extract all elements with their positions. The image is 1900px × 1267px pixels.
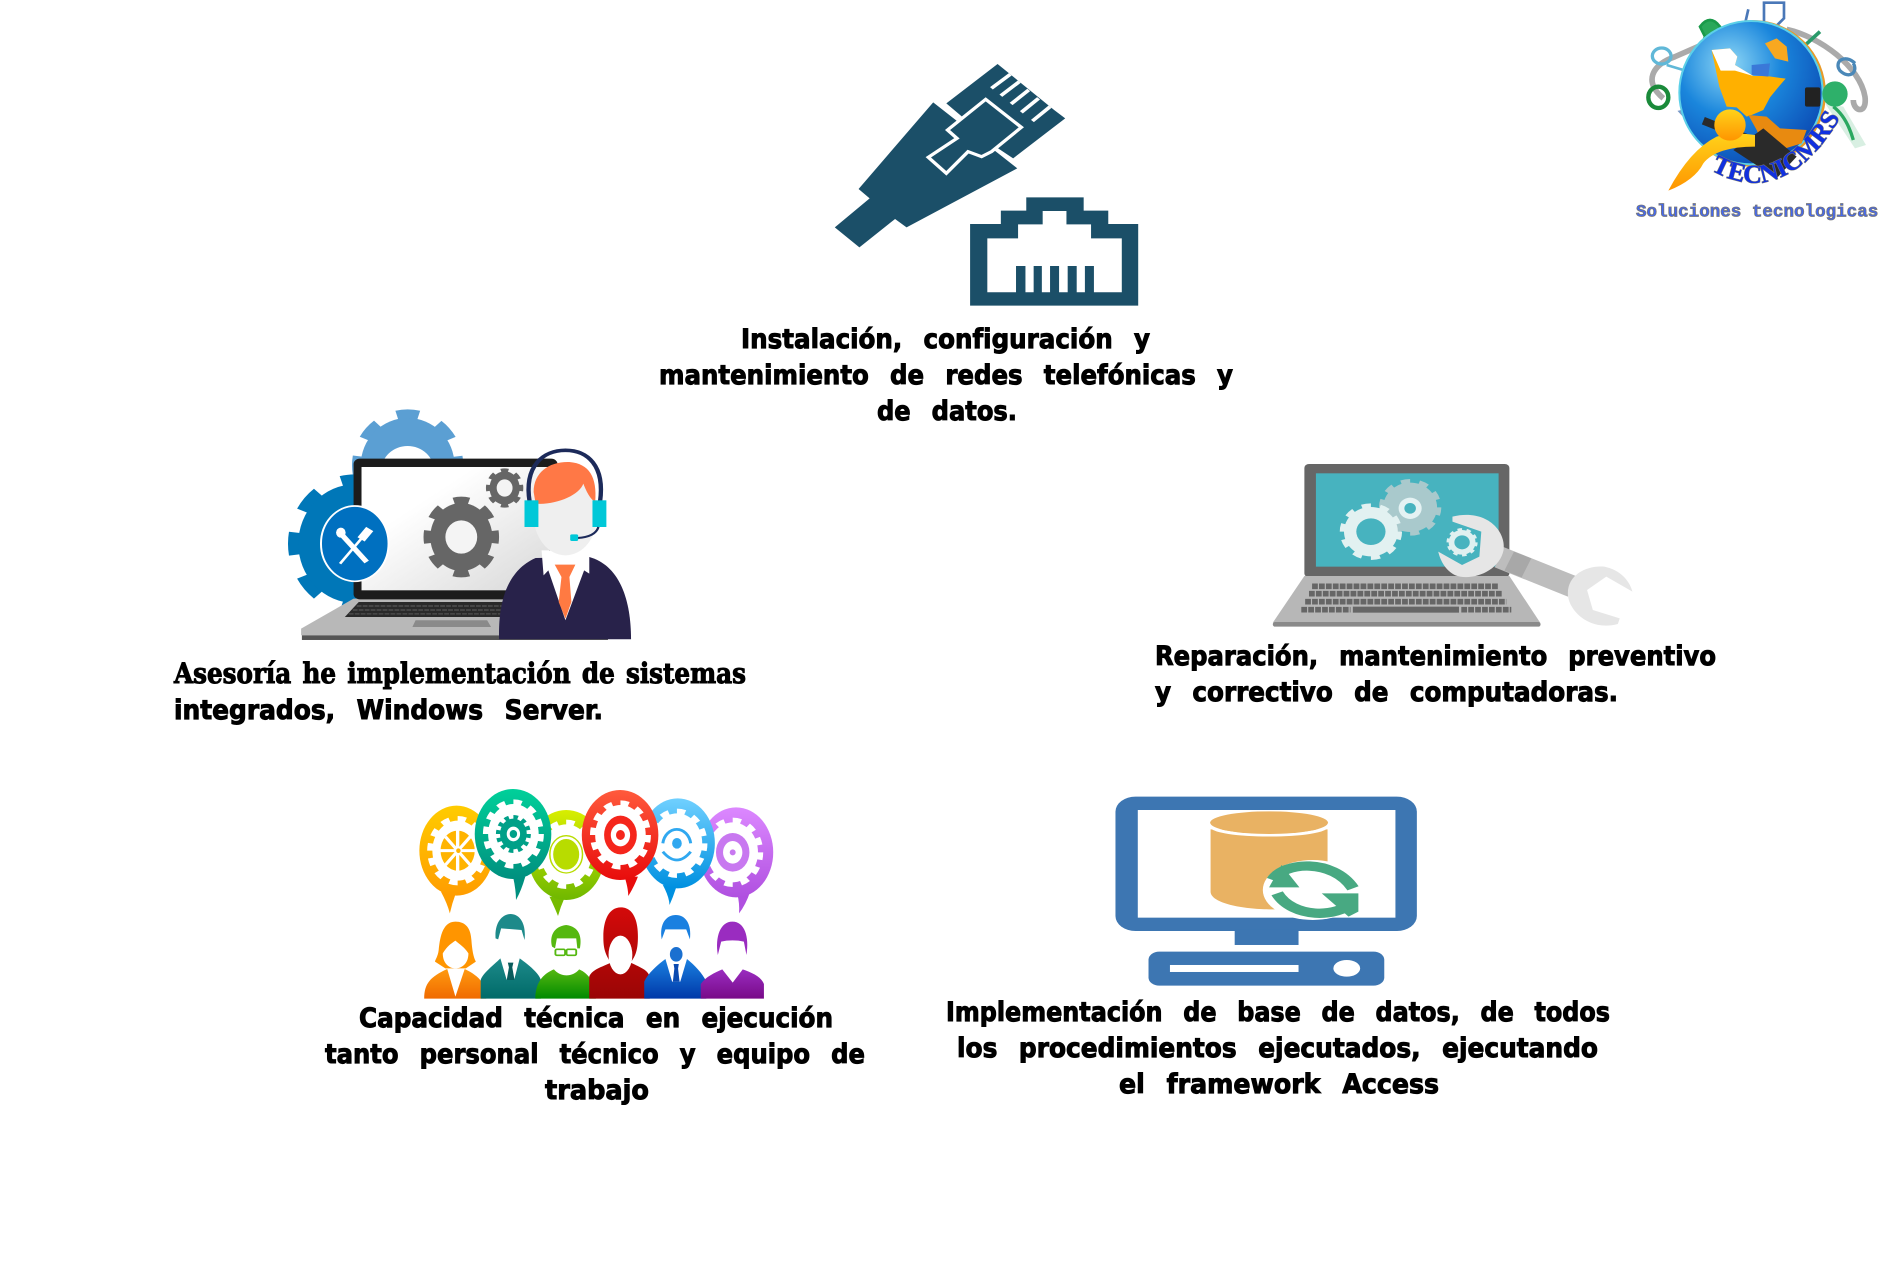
icon: network cable and socket	[835, 64, 1138, 306]
laptop base	[1273, 576, 1541, 627]
logo green figure	[1825, 103, 1866, 148]
person: orange woman	[424, 922, 486, 999]
text: capacidad tecnica: Capacidad técnica en ejecución	[359, 1003, 833, 1034]
person: green man with glasses	[535, 925, 596, 999]
bubble: teal	[475, 789, 551, 900]
large grey gear	[429, 501, 494, 573]
wrench right head	[1568, 566, 1632, 626]
text: reparacion: y correctivo de computadoras.	[1155, 677, 1618, 708]
person: blue man with beard	[644, 915, 706, 999]
back gear	[1382, 482, 1438, 533]
laptop base	[301, 599, 608, 640]
text: base de datos: el framework Access	[1119, 1069, 1439, 1100]
keyboard	[1301, 586, 1511, 610]
person: purple woman	[701, 922, 764, 999]
logo: Tecnicmrs	[1636, 1, 1878, 223]
logo black device	[1733, 128, 1797, 178]
text: asesoria	[173, 657, 746, 726]
person: teal man	[481, 914, 541, 999]
sync arrows	[1263, 860, 1363, 920]
light blue gear	[359, 415, 456, 515]
text: redes: Instalación, configuración y	[741, 324, 1150, 355]
icon: laptop with wrench	[1273, 464, 1632, 627]
text: base de datos	[946, 997, 1610, 1100]
agent hair	[534, 462, 596, 504]
text: reparacion: Reparación, mantenimiento preventivo	[1155, 641, 1716, 672]
laptop screen	[354, 459, 557, 599]
icon: laptop, gears and support agent	[295, 415, 631, 640]
logo peripheral icons	[1648, 3, 1855, 124]
computer base	[1149, 952, 1384, 986]
logo swoosh ring	[1652, 29, 1865, 110]
text: asesoria: Asesoría he implementación de sistemas	[173, 657, 746, 690]
panel: reparacion	[1155, 464, 1716, 708]
text: asesoria: integrados, Windows Server.	[174, 695, 603, 726]
small grey gear	[489, 471, 521, 505]
text: reparacion	[1155, 641, 1716, 708]
bubble: yellow	[419, 806, 494, 913]
small gear in wrench	[1448, 530, 1476, 555]
database cylinder	[1210, 811, 1328, 909]
person: red woman	[589, 907, 650, 999]
panel: capacidad tecnica	[325, 789, 865, 1106]
logo continents	[1712, 48, 1786, 117]
text: capacidad tecnica: tanto personal técnico y equipo de	[325, 1039, 865, 1070]
logo wordmark: TECNICMRS	[1714, 110, 1838, 184]
panel: redes	[659, 64, 1233, 427]
front gear	[1343, 506, 1399, 557]
dark blue gear	[295, 480, 414, 607]
text: capacidad tecnica	[325, 1003, 865, 1106]
headset	[524, 450, 606, 541]
bubble: blue	[641, 798, 715, 905]
logo globe	[1679, 20, 1826, 167]
logo tagline: Soluciones tecnologicas	[1636, 203, 1878, 223]
text: base de datos: Implementación de base de datos, de todos	[946, 997, 1610, 1028]
text: capacidad tecnica: trabajo	[545, 1075, 649, 1106]
text: redes	[659, 324, 1233, 427]
text: base de datos: los procedimientos ejecutados, ejecutando	[957, 1033, 1598, 1064]
icon: monitor with database	[1115, 797, 1417, 986]
monitor	[1115, 797, 1417, 945]
agent collar and tie	[542, 550, 589, 620]
wrench left head	[1438, 515, 1504, 577]
agent suit	[499, 557, 631, 639]
bubble: red	[582, 790, 658, 896]
panel: base de datos	[946, 797, 1610, 1100]
bubble: lime	[528, 810, 604, 916]
bubble: purple	[699, 807, 773, 913]
agent face	[534, 475, 597, 555]
logo orange figure	[1668, 134, 1755, 191]
tools badge	[321, 506, 389, 581]
icon: team with gear speech bubbles	[419, 789, 773, 999]
text: redes: de datos.	[877, 396, 1017, 427]
laptop screen	[1304, 464, 1509, 577]
wrench handle	[1495, 547, 1577, 597]
text: redes: mantenimiento de redes telefónicas y	[659, 360, 1233, 391]
panel: asesoria	[173, 415, 746, 726]
